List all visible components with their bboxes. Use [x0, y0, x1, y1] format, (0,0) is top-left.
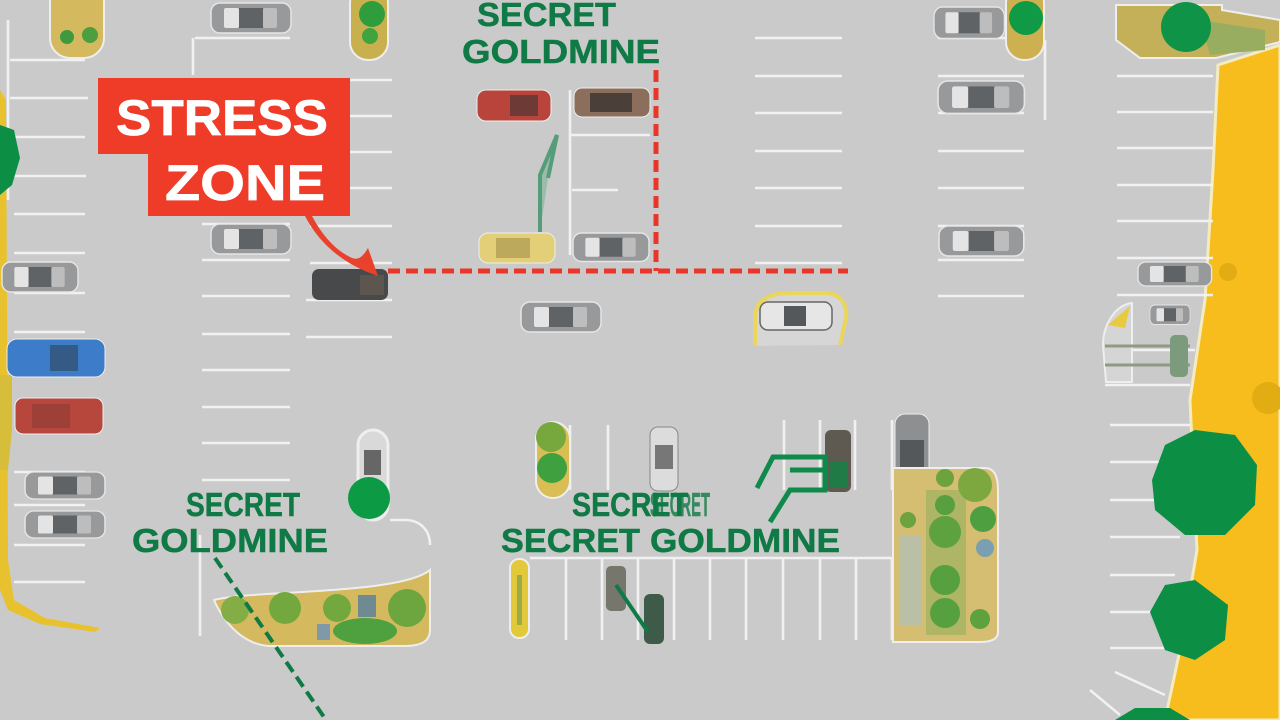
goldmine label bottom left: GOLDMINE	[132, 522, 328, 559]
planter: top right corner	[1116, 2, 1280, 58]
planter: top left	[50, 0, 104, 58]
stress label line 1: STRESS	[116, 90, 328, 146]
green arrow outline, right of centre	[757, 457, 825, 522]
planter: large right	[893, 468, 998, 642]
goldmine overlapped label bottom centre: SECRET	[501, 522, 640, 559]
car: yellow	[479, 233, 555, 263]
callout arrow	[305, 216, 378, 276]
island: right small	[1103, 303, 1190, 382]
car: white in yellow bay	[755, 293, 846, 346]
goldmine label top	[462, 0, 660, 70]
trees right	[1115, 430, 1257, 720]
tree left edge	[0, 125, 20, 195]
faint path arrow, centre	[540, 135, 557, 232]
red dashed route	[388, 70, 848, 271]
planter: top centre	[350, 0, 388, 60]
stress zone callout	[98, 78, 350, 216]
car: red	[477, 90, 551, 121]
goldmine overlapped label bottom centre: SECRET	[650, 486, 710, 523]
car: dark	[312, 269, 388, 300]
goldmine overlapped label bottom centre: SECRET	[572, 486, 688, 523]
car: vertical dark	[825, 430, 851, 492]
car: vertical white	[650, 427, 678, 491]
car: brown	[574, 88, 650, 117]
car: blue	[7, 339, 105, 377]
yellow verge right	[1165, 45, 1280, 720]
planter: top right	[1006, 0, 1044, 60]
stress label line 2: ZONE	[165, 155, 325, 211]
goldmine label bottom left	[132, 486, 328, 559]
goldmine label bottom left: SECRET	[186, 486, 300, 523]
planter: small round, lower left	[348, 430, 390, 520]
yellow verge shrubs	[1219, 263, 1280, 414]
goldmine overlapped label bottom centre	[501, 486, 840, 559]
green dashed route	[215, 558, 326, 720]
left verge shrubs	[0, 375, 12, 470]
car: dark red	[15, 398, 103, 434]
planter: bottom left	[214, 570, 430, 646]
yellow verge left	[0, 90, 100, 632]
car: vertical grey	[895, 414, 929, 504]
green arrow, bottom	[616, 585, 648, 632]
planter: narrow bottom	[510, 559, 529, 638]
goldmine overlapped label bottom centre: GOLDMINE	[650, 522, 840, 559]
car: small bottom	[606, 566, 664, 644]
planter: centre round	[536, 422, 570, 498]
goldmine label top: GOLDMINE	[462, 33, 660, 70]
